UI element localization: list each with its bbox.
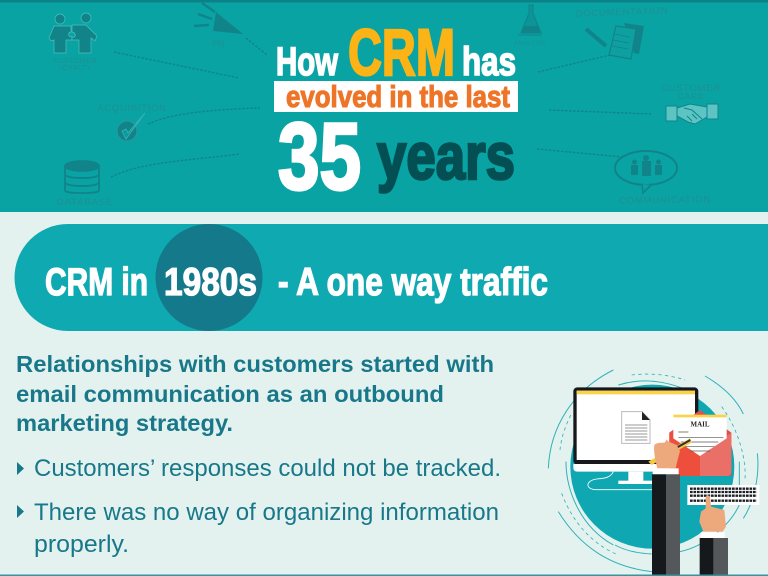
dashed connectors [111, 38, 651, 177]
title line 3: 35 [278, 104, 361, 210]
monitor [573, 387, 698, 490]
title line 1: CRM [348, 15, 455, 89]
title line 1: has [462, 40, 516, 84]
teal disc [570, 385, 734, 549]
section heading: CRM in [45, 261, 148, 304]
icon: customer loyalty: LOYALTY [58, 65, 92, 72]
title line 3: years [377, 119, 515, 193]
envelope with mail: MAIL [690, 421, 710, 429]
title line 3 [278, 104, 515, 210]
keyboard [687, 485, 759, 505]
icon: PR megaphone: PR [211, 38, 226, 50]
panel: header banner [0, 0, 768, 212]
icon: acquisition check [97, 103, 167, 141]
pen hand and arm [648, 438, 692, 575]
bullet list [17, 455, 501, 558]
icon: PR megaphone [194, 3, 243, 50]
text block: intro: Relationships with customers started with [16, 351, 494, 377]
document icon [622, 412, 650, 443]
icon: acquisition check: ACQUISITION [97, 103, 167, 114]
icon: analysis flask: ANALYSIS [514, 41, 546, 47]
icon: database [57, 161, 113, 208]
text block: intro: email communication as an outbound [16, 381, 444, 407]
section heading: 1980s [164, 261, 257, 304]
icon: analysis flask [514, 5, 546, 47]
illustration: email marketing at computer [548, 370, 759, 575]
panel: section banner [14, 224, 768, 331]
title line 2 box: evolved in the last [286, 79, 510, 114]
bullet 2: properly. [34, 531, 129, 558]
icon: customer care handshake: CUSTOMER [661, 83, 721, 94]
text block: intro: marketing strategy. [16, 410, 233, 436]
bullet 2 [17, 499, 499, 558]
icon: customer care handshake: CARE [678, 91, 704, 101]
title [274, 15, 518, 210]
bullet 2: There was no way of organizing information [34, 499, 499, 526]
bottom rule [0, 574, 768, 576]
title line 1 [276, 15, 516, 89]
title line 1: How [276, 40, 339, 84]
orbit rings [548, 370, 758, 572]
icon: documentation [575, 5, 669, 59]
typing hand and arm [699, 495, 728, 575]
icon: communication speech bubble: COMMUNICATION [619, 194, 711, 207]
icon: documentation: DOCUMENTATION [575, 5, 669, 20]
section heading [45, 261, 548, 304]
bullet 1: Customers’ responses could not be tracked. [34, 455, 501, 482]
icon: database: DATABASE [57, 197, 113, 208]
text block: intro [16, 351, 494, 436]
icon: communication speech bubble [615, 151, 711, 207]
icon: customer loyalty [49, 13, 97, 72]
era circle [156, 224, 262, 331]
icon: customer loyalty: CUSTOMER [53, 58, 97, 65]
section heading: - A one way traffic [278, 261, 548, 304]
icon: customer care handshake [661, 83, 721, 124]
envelope with mail [669, 410, 731, 476]
